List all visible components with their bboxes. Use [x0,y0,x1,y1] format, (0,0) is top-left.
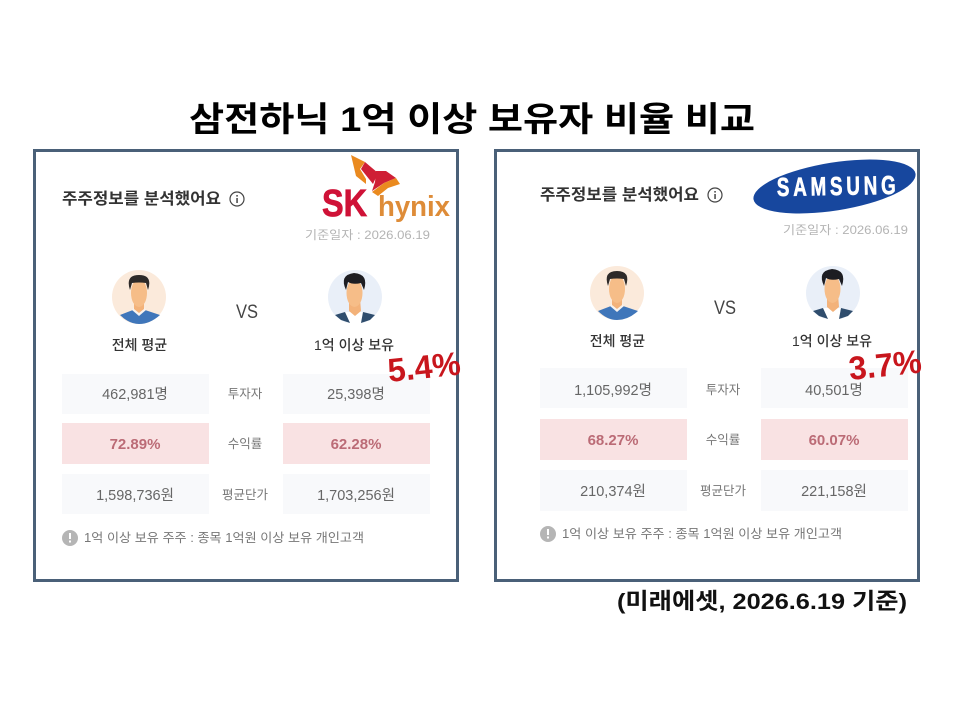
icon: info [708,188,722,202]
date: 기준일자 : 2026.06.19 [783,223,908,237]
logo: SK hynix: SK [322,183,367,225]
row: average price: 평균단가 [222,488,268,502]
logo: SK hynix: hynix [378,191,450,223]
title: 삼전하닉 1억 이상 보유자 비율 비교 [189,101,755,139]
row: investors: 1,105,992명 [574,382,652,399]
row: return rate: 68.27% [588,432,638,449]
source note: (미래에셋, 2026.6.19 기준) [617,589,907,614]
row: return rate: 62.28% [331,436,381,453]
label: 100M+ holders: 1억 이상 보유 [314,337,394,353]
label: 100M+ holders: 1억 이상 보유 [792,333,872,349]
label: overall average: 전체 평균 [112,337,167,353]
row: return rate: 수익률 [706,433,740,447]
logo: SK hynix [322,155,450,225]
heading: shareholder analysis: 주주정보를 분석했어요 [62,190,221,208]
row: average price: 1,703,256원 [317,487,395,504]
avatar: overall average [590,266,644,320]
row: return rate: 60.07% [809,432,859,449]
label: VS: VS [714,298,736,319]
callout: SK hynix 5.4%: 5.4% [386,345,462,389]
callout: Samsung 3.7%: 3.7% [847,343,923,387]
row: investors: 투자자 [706,383,741,397]
label: overall average: 전체 평균 [590,333,645,349]
logo: Samsung [750,150,919,223]
row: investors: 투자자 [228,387,263,401]
avatar: 100M+ holder [328,270,382,324]
panel: SK hynix [34,150,458,580]
row: investors: 40,501명 [805,382,863,399]
logo: Samsung: SAMSUNG [777,170,896,202]
panel: Samsung [496,150,919,581]
row: investors: 25,398명 [327,386,385,403]
footnote: 1억 이상 보유 주주 : 종목 1억원 이상 보유 개인고객 [562,527,842,541]
footnote: 1억 이상 보유 주주 : 종목 1억원 이상 보유 개인고객 [84,531,364,545]
row: average price [62,474,430,514]
row: investors: 462,981명 [102,386,168,403]
row: return rate: 수익률 [228,437,262,451]
row: average price: 210,374원 [580,483,646,500]
heading: shareholder analysis: 주주정보를 분석했어요 [540,186,699,204]
avatar: overall average [112,270,166,324]
date: 기준일자 : 2026.06.19 [305,228,430,242]
row: return rate: 72.89% [110,436,160,453]
row: return rate [62,423,430,464]
icon: info [230,192,244,206]
row: average price [540,470,908,511]
row: average price: 221,158원 [801,483,867,500]
avatar: 100M+ holder [806,266,860,320]
row: investors [62,374,430,414]
label: VS: VS [236,302,258,323]
row: investors [540,368,908,408]
row: return rate [540,419,908,460]
row: average price: 평균단가 [700,484,746,498]
row: average price: 1,598,736원 [96,487,174,504]
